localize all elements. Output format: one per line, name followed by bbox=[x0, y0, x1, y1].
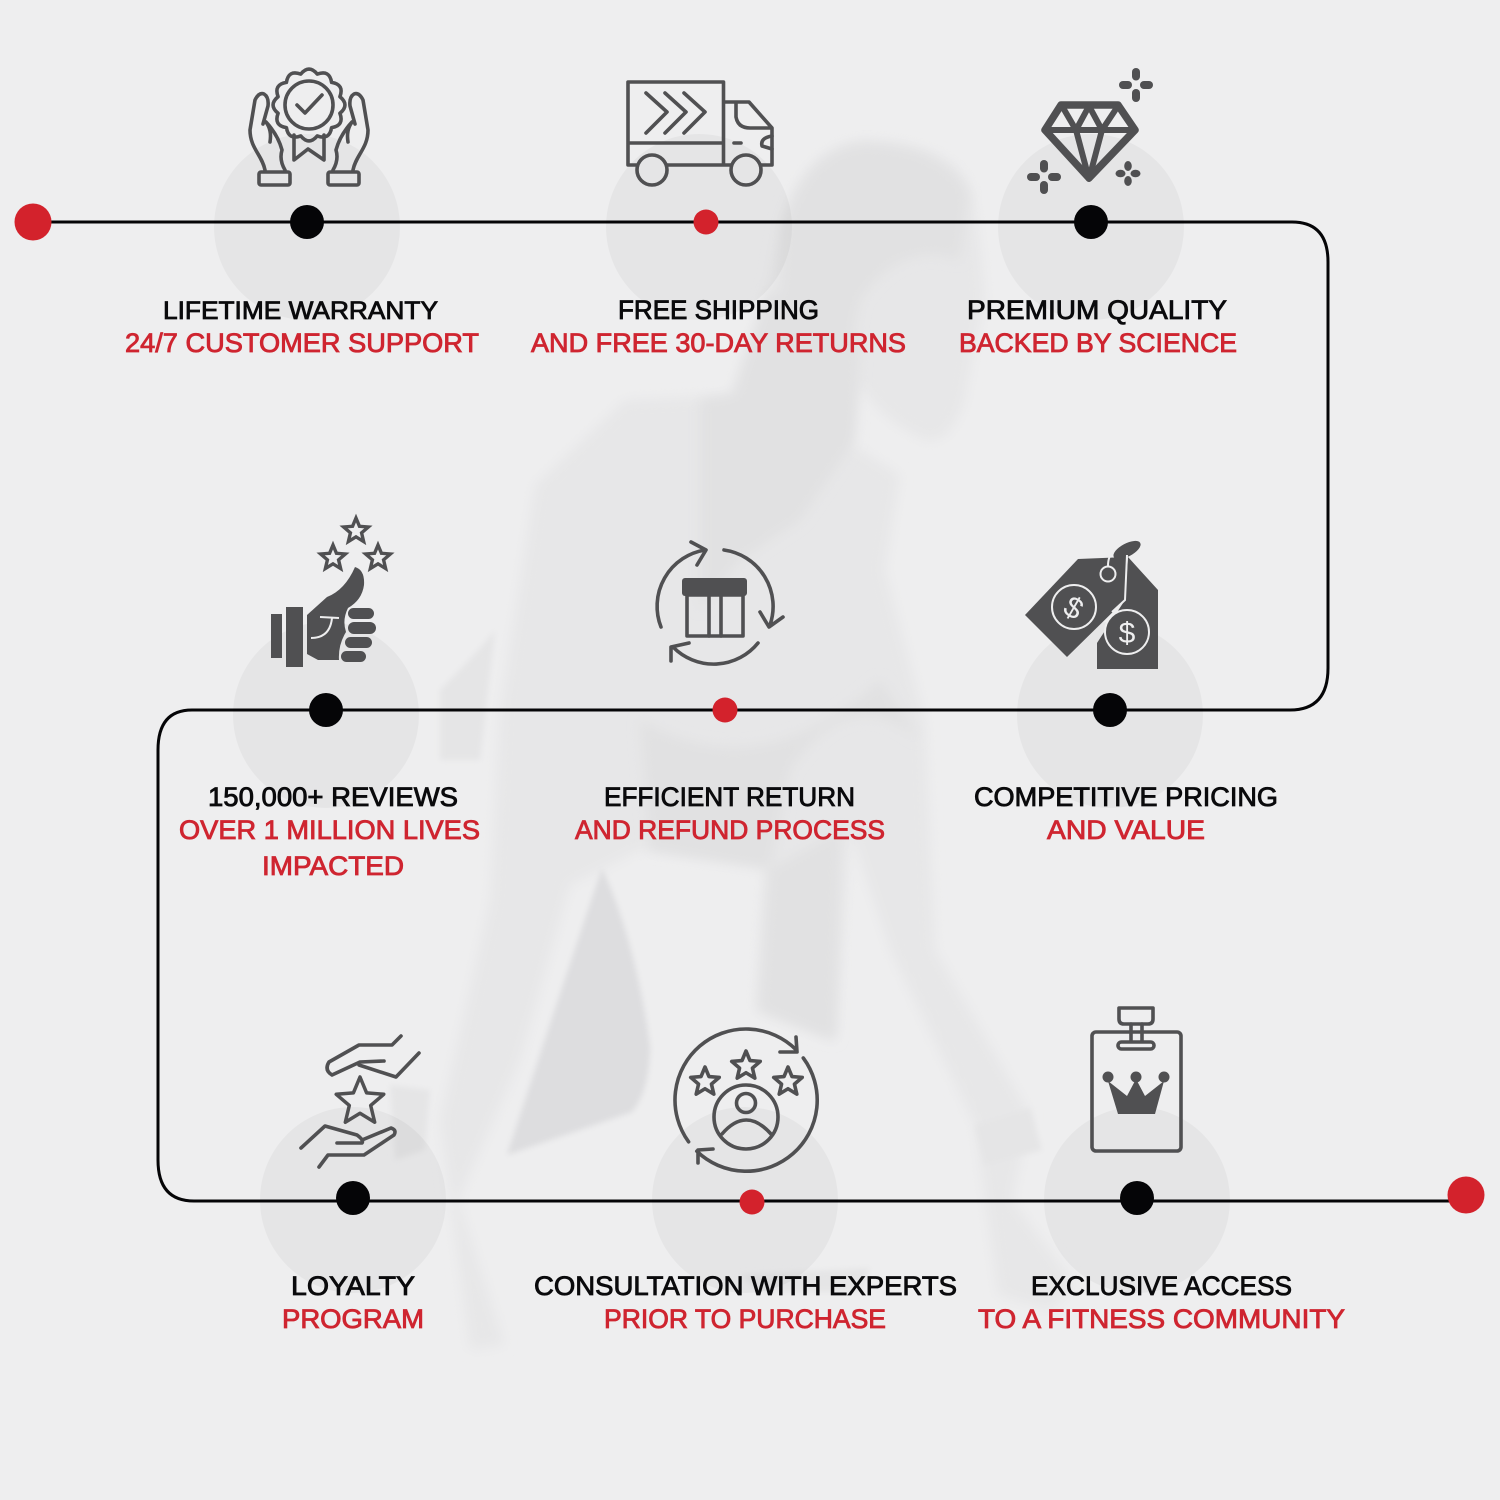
label: premium quality bbox=[959, 295, 1237, 358]
dot bbox=[694, 210, 718, 234]
timeline path bbox=[33, 222, 1466, 1201]
label: loyalty program: PROGRAM bbox=[282, 1304, 424, 1334]
item: free shipping bbox=[531, 82, 906, 358]
icon: perfume bottle with crown bbox=[1092, 1008, 1181, 1151]
icon: thumbs up with stars bbox=[271, 518, 390, 667]
item: efficient return bbox=[575, 542, 885, 845]
label: free shipping: FREE SHIPPING bbox=[618, 295, 819, 325]
item: lifetime warranty bbox=[125, 69, 479, 358]
label: exclusive access: EXCLUSIVE ACCESS bbox=[1031, 1271, 1292, 1301]
background athlete silhouette bbox=[390, 140, 1075, 1350]
label: competitive pricing bbox=[974, 782, 1278, 845]
icon: box with return arrows bbox=[657, 542, 783, 664]
icon: customer rating circle bbox=[675, 1029, 817, 1171]
item: competitive pricing bbox=[974, 537, 1278, 845]
label: efficient return bbox=[575, 782, 885, 845]
label: free shipping: AND FREE 30-DAY RETURNS bbox=[531, 328, 906, 358]
item: reviews bbox=[179, 518, 480, 881]
dot bbox=[290, 205, 324, 239]
label: efficient return: EFFICIENT RETURN bbox=[604, 782, 855, 812]
icon: price tags: $ bbox=[1058, 590, 1089, 627]
dot bbox=[712, 698, 738, 722]
label: reviews: IMPACTED bbox=[262, 851, 404, 881]
dot bbox=[1074, 205, 1108, 239]
icon: delivery truck bbox=[628, 82, 772, 185]
label: competitive pricing: AND VALUE bbox=[1047, 815, 1205, 845]
label: free shipping bbox=[531, 295, 906, 358]
icon: diamond with sparkles bbox=[1027, 68, 1153, 194]
icon: hands with star bbox=[301, 1036, 419, 1167]
timeline end dot bbox=[1448, 1176, 1484, 1214]
label: loyalty program bbox=[282, 1271, 424, 1334]
timeline start dot bbox=[14, 204, 52, 240]
label: lifetime warranty: LIFETIME WARRANTY bbox=[163, 297, 438, 325]
label: reviews: 150,000+ REVIEWS bbox=[208, 782, 458, 812]
label: consultation: PRIOR TO PURCHASE bbox=[604, 1304, 886, 1334]
icon: price tags bbox=[1025, 537, 1158, 669]
label: premium quality: PREMIUM QUALITY bbox=[967, 295, 1227, 325]
dot bbox=[309, 693, 343, 727]
item: premium quality bbox=[959, 68, 1237, 358]
label: consultation: CONSULTATION WITH EXPERTS bbox=[534, 1271, 957, 1301]
dot bbox=[740, 1190, 764, 1214]
dot bbox=[336, 1181, 370, 1215]
icon: hands holding medal bbox=[250, 69, 368, 185]
item: consultation bbox=[534, 1029, 957, 1334]
label: reviews: OVER 1 MILLION LIVES bbox=[179, 815, 480, 845]
dot bbox=[1120, 1181, 1154, 1215]
dot bbox=[1093, 693, 1127, 727]
label: efficient return: AND REFUND PROCESS bbox=[575, 815, 885, 845]
label: reviews bbox=[179, 782, 480, 881]
label: competitive pricing: COMPETITIVE PRICING bbox=[974, 782, 1278, 812]
label: consultation bbox=[534, 1271, 957, 1334]
item: exclusive access bbox=[978, 1008, 1345, 1334]
label: lifetime warranty bbox=[125, 297, 479, 358]
label: loyalty program: LOYALTY bbox=[291, 1271, 415, 1301]
label: premium quality: BACKED BY SCIENCE bbox=[959, 328, 1237, 358]
label: lifetime warranty: 24/7 CUSTOMER SUPPORT bbox=[125, 328, 479, 358]
item: loyalty program bbox=[260, 1036, 446, 1334]
label: exclusive access bbox=[978, 1271, 1345, 1334]
label: exclusive access: TO A FITNESS COMMUNITY bbox=[978, 1304, 1345, 1334]
icon: price tags: $ bbox=[1119, 617, 1136, 650]
